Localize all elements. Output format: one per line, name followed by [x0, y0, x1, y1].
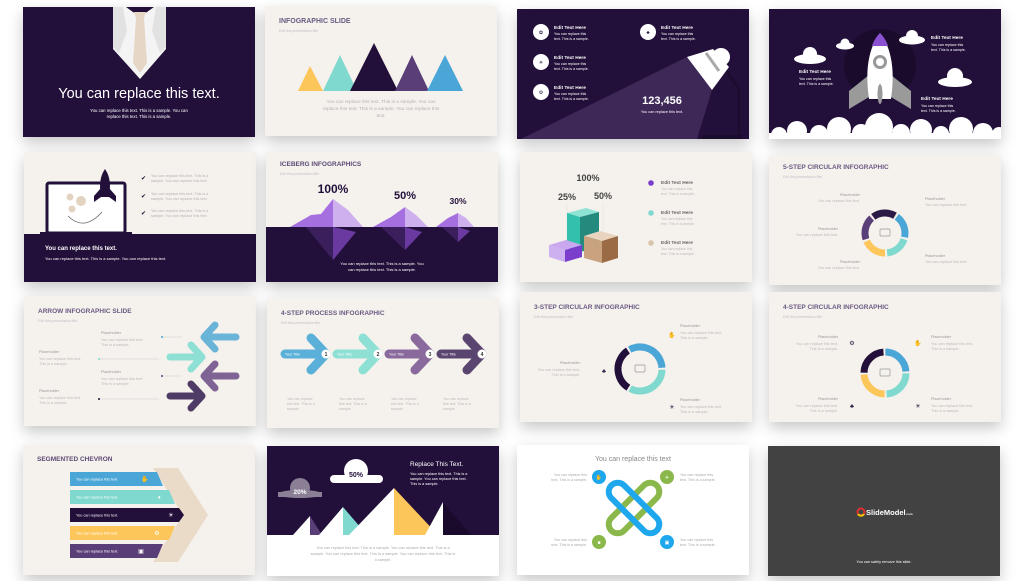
list items: Edit Text Here — [661, 25, 693, 31]
texts: text. This is a sample. — [680, 478, 716, 482]
text blocks: Edit Text Here — [799, 69, 831, 75]
labels: You can replace this text. — [796, 233, 838, 237]
chart: 5 segment ring — [857, 205, 913, 261]
arrows — [170, 325, 236, 408]
legend: text. This is a sample. — [661, 252, 695, 256]
legend: You can replace this — [661, 217, 693, 221]
icons: ♣ — [602, 369, 606, 375]
cloud 20% — [278, 478, 322, 498]
chevron bars — [70, 472, 184, 558]
texts — [551, 473, 716, 547]
subtext: replace this text. This is a sample. — [107, 114, 171, 119]
text block — [323, 99, 440, 119]
step numbers: 3 — [429, 352, 432, 358]
connectors — [99, 337, 182, 399]
labels: Placeholder — [818, 227, 839, 231]
text blocks: Edit Text Here — [931, 35, 963, 41]
chevron bars: ⚙ — [154, 530, 160, 537]
corner icons: ✋ — [596, 474, 602, 481]
labels: This is a sample. — [810, 347, 838, 351]
slide 6: iceberg infographics — [266, 152, 498, 282]
percentages: 25% — [558, 192, 576, 202]
labels: You can replace this text. — [680, 405, 722, 409]
subtext: sample. You can replace this text. — [410, 477, 467, 481]
subtitle: Edit this presentation title — [279, 29, 318, 33]
chevron bars: ✋ — [141, 475, 149, 483]
slide 10: 4-step process — [267, 298, 499, 428]
corner icons: ✈ — [665, 475, 669, 481]
chevron background — [153, 468, 208, 562]
checklist: ✔ — [141, 194, 146, 200]
number caption: You can replace this text. — [641, 110, 683, 114]
text block — [340, 261, 424, 272]
list items: ♣ — [646, 30, 650, 36]
labels: You can replace this text. — [818, 199, 860, 203]
chevron bars: ☀ — [168, 512, 174, 519]
step numbers: Your Title — [337, 352, 352, 356]
text blocks: You can replace this — [921, 104, 953, 108]
text block: sample. You can replace this text. This is a sample. You can replace this text. This is — [311, 551, 455, 556]
heading: You can replace this text. — [58, 86, 220, 102]
labels: Placeholder — [39, 350, 60, 354]
checklist: ✔ — [141, 211, 146, 217]
icons: ⚙ — [849, 340, 855, 347]
list items: You can replace this — [661, 32, 693, 36]
light beam — [521, 57, 712, 139]
title: 5-STEP CIRCULAR INFOGRAPHIC — [783, 164, 889, 171]
chevron bars: ▣ — [138, 549, 144, 555]
labels: Placeholder — [818, 335, 839, 339]
icons — [602, 331, 676, 411]
chevron bars: You can replace this text. — [76, 532, 118, 536]
title: 3-STEP CIRCULAR INFOGRAPHIC — [534, 304, 640, 311]
percentages: 50% — [594, 191, 612, 201]
labels: You can replace this text. — [925, 203, 967, 207]
slide 12: 4-step circular — [769, 292, 1001, 422]
labels — [796, 335, 973, 413]
texts: You can replace this — [554, 538, 587, 542]
texts: You can replace this — [680, 473, 713, 477]
slide 3: lamp spotlight — [517, 9, 749, 139]
logo: SlideModel.com — [866, 508, 913, 517]
labels: Placeholder — [680, 324, 701, 328]
heading: You can replace this text. — [45, 246, 117, 252]
step numbers: 1 — [325, 352, 328, 358]
small clouds — [794, 30, 972, 87]
legend — [648, 180, 695, 256]
icons: ♣ — [850, 404, 854, 410]
number callout: 123,456 — [642, 95, 682, 107]
step texts: sample. — [391, 407, 404, 411]
percentages — [558, 173, 612, 202]
corner icons: ■ — [597, 540, 601, 546]
title: You can replace this text — [595, 456, 671, 463]
list items: Edit Text Here — [554, 85, 586, 91]
labels: You can replace this text. — [101, 338, 143, 342]
subtitle: Edit this presentation title — [281, 321, 320, 325]
step texts: this text. This is a — [339, 402, 367, 406]
text blocks: You can replace this — [799, 77, 831, 81]
slide 5: laptop rocket — [24, 152, 256, 282]
checklist: You can replace this text. This is a — [151, 174, 209, 178]
chevron bars: You can replace this text. — [76, 550, 118, 554]
chart: triangles — [298, 43, 463, 91]
step texts: You can replace — [339, 397, 365, 401]
process arrows — [285, 338, 482, 370]
chevron bars: You can replace this text. — [76, 478, 118, 482]
legend: Edit Text Here — [661, 180, 693, 186]
chart: 3D boxes — [549, 204, 618, 263]
chevron bars: You can replace this text. — [76, 496, 118, 500]
step texts — [287, 397, 471, 411]
checklist: sample. You can replace this text. — [151, 197, 208, 201]
step numbers: Your Title — [441, 352, 456, 356]
text blocks: You can replace this — [931, 43, 963, 47]
slide 4: rocket with clouds — [769, 9, 1001, 139]
corner icons: ▣ — [665, 540, 670, 546]
title: ICEBERG INFOGRAPHICS — [280, 161, 362, 168]
chevron bars: You can replace this text. — [76, 514, 118, 518]
title: INFOGRAPHIC SLIDE — [279, 18, 351, 25]
step numbers: Your Title — [285, 352, 300, 356]
step texts: You can replace — [287, 397, 313, 401]
labels: Placeholder — [101, 370, 122, 374]
subtext: You can replace this text. This is a sample. You can replace this text. — [45, 256, 166, 261]
slide 1: suit title slide — [23, 7, 255, 137]
labels: Placeholder — [840, 193, 861, 197]
title: 4-STEP PROCESS INFOGRAPHIC — [281, 310, 385, 317]
step numbers: 2 — [377, 352, 380, 358]
percentages — [318, 182, 467, 206]
step texts: sample. — [287, 407, 300, 411]
chart: icebergs — [290, 199, 474, 260]
labels — [538, 324, 722, 414]
icons: ✋ — [668, 331, 676, 339]
cloud 20%: 20% — [293, 489, 307, 496]
bottom clouds — [769, 113, 1006, 143]
labels: This is a sample. — [39, 401, 68, 405]
labels — [39, 331, 143, 405]
labels: This is a sample. — [931, 409, 960, 413]
checklist: You can replace this text. This is a — [151, 209, 209, 213]
step numbers: 4 — [481, 352, 484, 358]
labels: This is a sample. — [680, 410, 708, 414]
labels: This is a sample. — [101, 343, 130, 347]
legend: text. This is a sample. — [661, 192, 695, 196]
title: SEGMENTED CHEVRON — [37, 456, 113, 463]
percentages: 30% — [449, 196, 467, 206]
subtext — [90, 108, 188, 119]
cloud 50% — [330, 459, 383, 483]
checklist: sample. You can replace this text. — [151, 214, 208, 218]
labels: You can replace this text. — [925, 260, 967, 264]
step texts: this text. This is a — [287, 402, 315, 406]
list items: text. This is a sample. — [554, 97, 589, 101]
step texts: this text. This is a — [443, 402, 471, 406]
icon: rocket — [849, 33, 911, 109]
subtitle: Edit this presentation title — [783, 175, 822, 179]
slide 16: SlideModel end slide — [768, 446, 1000, 576]
corner icons — [592, 470, 674, 549]
icon: lamp — [687, 48, 742, 139]
chevron bars: ◕ — [157, 495, 161, 501]
mountains — [293, 488, 471, 535]
labels: You can replace this text. — [796, 342, 838, 346]
list items: text. This is a sample. — [661, 37, 696, 41]
text block: replace this text. This is a sample. You can replace this — [323, 106, 440, 112]
labels: This is a sample. — [101, 382, 130, 386]
legend: You can replace this — [661, 187, 693, 191]
step texts: this text. This is a — [391, 402, 419, 406]
slide 11: 3-step circular — [520, 292, 752, 422]
legend: You can replace this — [661, 247, 693, 251]
list items: You can replace this — [554, 92, 586, 96]
step texts: sample. — [443, 407, 456, 411]
chain links — [605, 479, 663, 537]
subtitle: Edit this presentation title — [783, 315, 822, 319]
title: 4-STEP CIRCULAR INFOGRAPHIC — [783, 304, 889, 311]
labels: This is a sample. — [680, 336, 708, 340]
labels: Placeholder — [931, 335, 952, 339]
texts: text. This is a sample. — [680, 543, 716, 547]
chart: 4 segment ring — [864, 352, 906, 394]
labels: You can replace this text. — [931, 342, 973, 346]
labels: You can replace this text. — [796, 404, 838, 408]
percentages: 100% — [576, 173, 600, 183]
labels: Placeholder — [925, 197, 946, 201]
list items: ✿ — [539, 30, 543, 36]
slide 14: mountains and clouds — [267, 446, 499, 576]
text block: can replace this text. This is a sample. — [348, 267, 416, 272]
subtitle: Edit this presentation title — [38, 319, 77, 323]
checklist: ✔ — [141, 176, 146, 182]
subtext: This is a sample. — [410, 482, 438, 486]
text block — [311, 545, 455, 562]
checklist — [141, 174, 209, 218]
subtitle: Edit this presentation title — [280, 172, 319, 176]
checklist: You can replace this text. This is a — [151, 192, 209, 196]
list items: You can replace this — [554, 32, 586, 36]
text block: a sample. — [375, 557, 391, 562]
texts: You can replace this — [554, 473, 587, 477]
icons — [849, 339, 922, 410]
heading: Replace This Text. — [410, 461, 463, 468]
text block: text. — [376, 113, 386, 119]
title: ARROW INFOGRAPHIC SLIDE — [38, 308, 132, 315]
slide 8: 5-step circular — [769, 155, 1001, 285]
text block: You can replace this text. This is a sample. You can — [326, 99, 436, 105]
icons: ☀ — [915, 403, 921, 410]
list items — [533, 24, 696, 101]
labels: You can replace this text. — [39, 357, 81, 361]
subtitle: Edit this presentation title — [534, 315, 573, 319]
labels: This is a sample. — [810, 409, 838, 413]
footer text: You can safely remove this slide. — [856, 560, 912, 564]
labels: This is a sample. — [931, 347, 960, 351]
percentages: 50% — [394, 190, 416, 202]
legend: text. This is a sample. — [661, 222, 695, 226]
icon: suit collar and tie — [113, 7, 166, 79]
checklist: sample. You can replace this text. — [151, 179, 208, 183]
texts: text. This is a sample. — [551, 478, 587, 482]
cloud 50%: 50% — [349, 472, 364, 479]
labels: Placeholder — [925, 254, 946, 258]
subtext — [410, 472, 468, 486]
labels: You can replace this text. — [101, 377, 143, 381]
text blocks: text. This is a sample. — [921, 109, 956, 113]
list items: Edit Text Here — [554, 55, 586, 61]
texts: You can replace this — [680, 538, 713, 542]
text blocks: text. This is a sample. — [799, 82, 834, 86]
list items: Edit Text Here — [554, 25, 586, 31]
text blocks: Edit Text Here — [921, 96, 953, 102]
labels: Placeholder — [931, 397, 952, 401]
slide 9: arrow infographic — [24, 296, 256, 426]
list items: text. This is a sample. — [554, 67, 589, 71]
labels: You can replace this text. — [538, 368, 580, 372]
labels: Placeholder — [101, 331, 122, 335]
icon: laptop with rocket — [40, 169, 132, 235]
icons: ☀ — [669, 404, 675, 411]
legend: Edit Text Here — [661, 240, 693, 246]
text blocks — [799, 35, 966, 113]
list items: ⚙ — [539, 90, 544, 96]
legend: Edit Text Here — [661, 210, 693, 216]
step texts: You can replace — [443, 397, 469, 401]
labels — [796, 193, 967, 270]
labels: Placeholder — [818, 397, 839, 401]
labels: You can replace this text. — [818, 266, 860, 270]
slide 2: infographic triangles — [265, 6, 497, 136]
text blocks: text. This is a sample. — [931, 48, 966, 52]
text block: You can replace this text. This is a sample. You can replace this text. This is a — [316, 545, 451, 550]
labels: You can replace this text. — [39, 396, 81, 400]
slide 7: 3D boxes — [520, 152, 752, 282]
labels: Placeholder — [840, 260, 861, 264]
text block: You can replace this text. This is a sample. You — [340, 261, 424, 266]
list items: ☀ — [539, 60, 544, 66]
labels: You can replace this text. — [680, 331, 722, 335]
subtext: You can replace this text. This is a sample. You can — [90, 108, 188, 113]
list items: You can replace this — [554, 62, 586, 66]
step texts: You can replace — [391, 397, 417, 401]
slide 13: segmented chevron — [23, 445, 255, 575]
labels: This is a sample. — [552, 373, 580, 377]
texts: text. This is a sample. — [551, 543, 587, 547]
step numbers: Your Title — [389, 352, 404, 356]
chart: 3 segment ring — [610, 339, 670, 399]
labels: Placeholder — [680, 398, 701, 402]
labels: Placeholder — [560, 361, 581, 365]
step numbers — [285, 350, 486, 358]
slide 15: chain X — [517, 445, 749, 575]
labels: You can replace this text. — [931, 404, 973, 408]
labels: Placeholder — [39, 389, 60, 393]
percentages: 100% — [318, 182, 349, 196]
subtext: You can replace this text. This is a — [410, 472, 468, 476]
icons: ✋ — [914, 339, 922, 347]
list items: text. This is a sample. — [554, 37, 589, 41]
labels: This is a sample. — [39, 362, 68, 366]
step texts: sample. — [339, 407, 352, 411]
